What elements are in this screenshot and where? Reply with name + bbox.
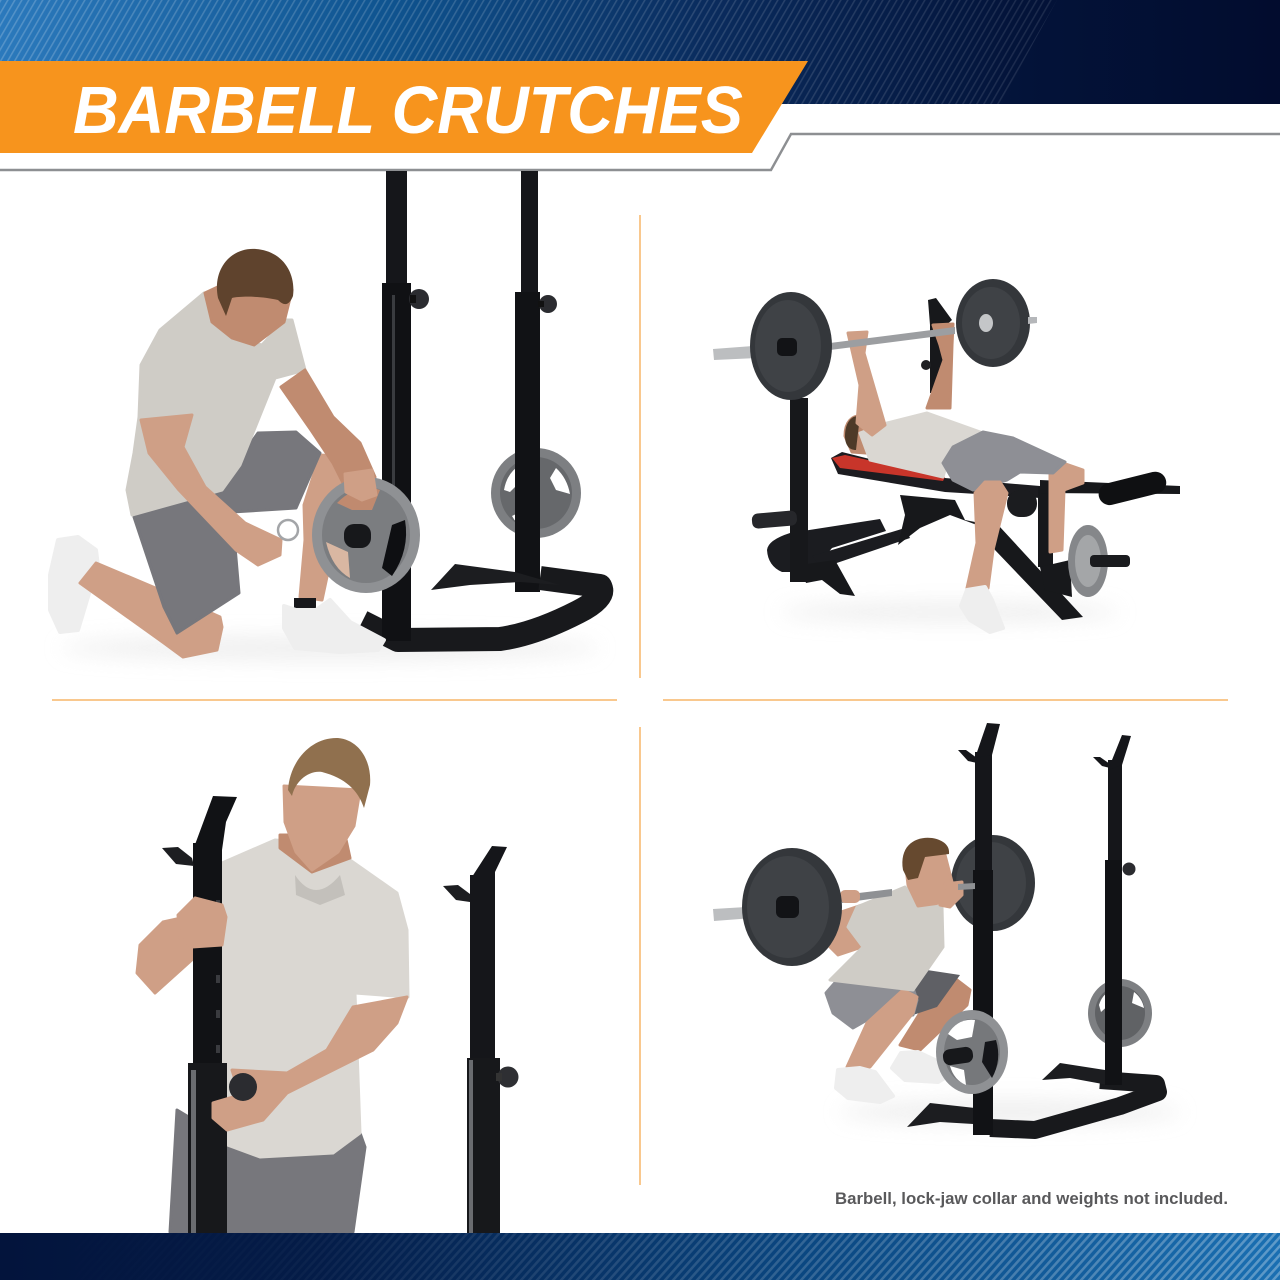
hair	[217, 249, 293, 316]
arms	[848, 332, 885, 435]
arm	[828, 905, 862, 955]
title banner	[0, 61, 808, 153]
left plate	[742, 848, 842, 966]
face	[905, 855, 952, 906]
rear plate	[951, 835, 1035, 931]
left post	[162, 796, 237, 1233]
squatter	[826, 838, 970, 1102]
front plate	[936, 1010, 1008, 1094]
footer band	[0, 1233, 1280, 1280]
near leg	[967, 482, 1007, 588]
neck and face	[205, 285, 292, 345]
rack foot bracket	[431, 564, 560, 590]
rear leg	[80, 563, 222, 657]
stored weight plate	[491, 448, 581, 538]
barbell	[713, 317, 1037, 360]
panel: squat	[713, 723, 1180, 1135]
right post	[443, 846, 518, 1233]
bench frame	[898, 495, 1083, 620]
hair	[902, 838, 949, 880]
bench pad	[831, 452, 1040, 498]
far leg	[900, 977, 970, 1050]
hand on plate	[345, 470, 376, 500]
barbell	[713, 883, 975, 921]
panel: man loading plate on crutches	[50, 171, 601, 660]
shorts	[134, 432, 320, 633]
base frame	[767, 519, 886, 572]
rack left post	[382, 171, 429, 641]
far leg	[1050, 462, 1083, 552]
shirt	[860, 413, 983, 477]
stored plate right	[1088, 979, 1152, 1047]
shirt	[222, 840, 408, 1157]
header white cutout	[0, 104, 1280, 170]
hands on bar	[940, 882, 962, 907]
face	[284, 786, 360, 870]
collar shading	[295, 875, 345, 905]
small plate	[1068, 525, 1130, 597]
arm on post	[137, 915, 195, 993]
neck	[280, 835, 350, 872]
right plate	[956, 279, 1030, 367]
man kneeling	[50, 249, 384, 657]
left plate	[750, 292, 832, 400]
adjustment knob	[229, 1073, 257, 1101]
panel: bench press	[713, 279, 1180, 632]
front shin	[300, 455, 352, 600]
title: BARBELL CRUTCHES	[73, 73, 743, 148]
panel dividers	[52, 215, 1228, 1185]
shorts	[943, 432, 1065, 490]
forearm	[213, 997, 407, 1130]
shirt	[127, 293, 305, 515]
left foot	[907, 1103, 990, 1127]
rack base frame	[362, 578, 601, 640]
left post and horn	[751, 398, 808, 582]
right foot	[1042, 1063, 1108, 1085]
leg developer	[1007, 469, 1180, 597]
right arm	[281, 370, 375, 495]
shirt	[830, 887, 943, 990]
left post	[958, 723, 1000, 1135]
right post	[1093, 735, 1136, 1085]
bench red trim	[832, 455, 945, 481]
rack right post	[515, 171, 557, 592]
plate held by man	[312, 477, 420, 593]
near shoe	[836, 1068, 893, 1102]
far shoe	[892, 1052, 948, 1082]
shorts	[170, 1110, 365, 1232]
sock	[294, 598, 316, 611]
shoe	[961, 587, 1003, 632]
header band	[0, 0, 1280, 104]
panel: man adjusting post	[137, 738, 518, 1233]
foot	[800, 560, 855, 596]
collar ring	[278, 520, 298, 540]
disclaimer note: Barbell, lock-jaw collar and weights not included.	[835, 1190, 1228, 1208]
header rule line	[0, 134, 1280, 170]
base lower beam	[812, 528, 910, 568]
right rack post	[921, 298, 952, 393]
rear shoe	[50, 537, 98, 632]
front shoe	[284, 600, 384, 652]
shorts	[826, 977, 917, 1028]
shorts rear tone	[913, 970, 960, 1015]
near leg	[847, 990, 917, 1067]
hand on post	[178, 898, 226, 947]
hair	[288, 738, 370, 808]
head	[845, 416, 866, 453]
left arm	[141, 415, 281, 565]
rack base frame	[990, 1080, 1158, 1130]
lifter	[845, 324, 1083, 632]
